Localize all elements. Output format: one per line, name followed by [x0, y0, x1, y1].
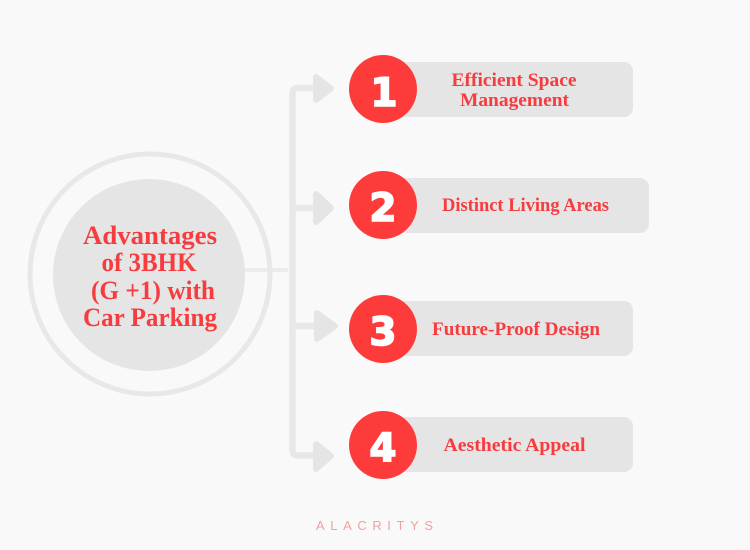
hub title: Advantages — [83, 221, 217, 250]
arrow 4 — [316, 444, 331, 469]
item 4: 4 — [369, 426, 397, 471]
item 3: Future-Proof Design — [432, 319, 600, 340]
arrow 2 — [316, 194, 331, 222]
arrow 1 — [316, 77, 331, 100]
arrow 3 — [317, 313, 335, 339]
hub title — [83, 221, 217, 332]
item 2: 2 — [369, 186, 397, 231]
item 4 — [349, 411, 633, 479]
item 3 — [349, 295, 633, 363]
item 1: 1 — [370, 71, 398, 116]
item 4: Aesthetic Appeal — [444, 435, 586, 456]
item 3: 3 — [369, 310, 397, 355]
hub title: Car Parking — [83, 303, 217, 332]
item 1: Management — [460, 90, 570, 111]
hub title: (G +1) with — [91, 276, 216, 305]
item 2 — [349, 171, 649, 239]
central hub circle — [30, 154, 270, 394]
hub title: of 3BHK — [102, 248, 197, 277]
item 1 — [349, 55, 633, 123]
item 1: Efficient Space — [452, 70, 576, 91]
item 2: Distinct Living Areas — [442, 195, 609, 216]
connector tree with arrows — [245, 77, 335, 469]
brand footer: ALACRITYS — [316, 518, 433, 533]
